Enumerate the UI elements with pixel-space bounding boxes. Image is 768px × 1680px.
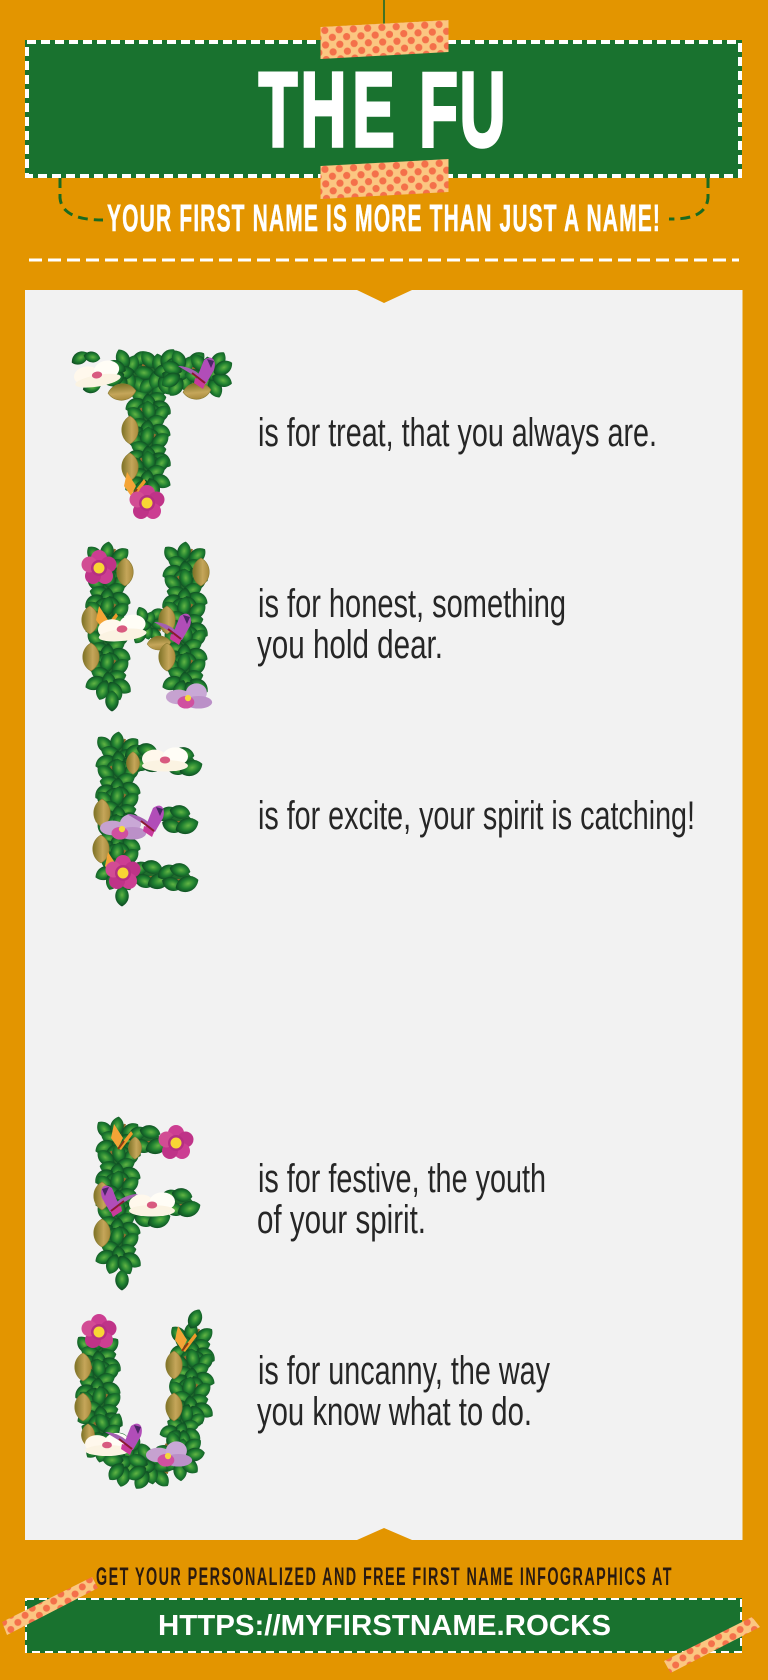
hanging line [383,0,385,25]
butterfly [101,1186,138,1217]
flower [129,1192,175,1216]
flower [97,613,147,643]
flower [72,359,122,390]
letter E [92,730,205,906]
butterfly [178,358,215,389]
butterfly [96,606,118,632]
butterfly [154,614,191,645]
flower [158,1125,194,1159]
title: THE FU [259,50,506,169]
text: U lines: you know what to do. [257,1390,532,1434]
flower [146,1441,192,1467]
dashed divider [29,258,739,262]
tape: bottom of header [320,159,448,199]
text: H lines: you hold dear. [257,623,443,667]
text: H lines: is for honest, something [258,582,566,626]
text: U lines [257,1349,550,1434]
text: U lines: is for uncanny, the way [258,1349,550,1393]
flower [82,1314,116,1348]
bracket: left [60,178,103,220]
footer url: HTTPS://MYFIRSTNAME.ROCKS [158,1610,611,1642]
letter F [92,1115,203,1290]
footer banner [25,1598,742,1653]
flower [85,1433,129,1456]
flower [130,485,164,519]
butterfly [111,1124,133,1150]
letter T [69,346,235,519]
text: F lines: is for festive, the youth [258,1157,546,1201]
butterfly [105,852,127,878]
letter H [82,540,212,712]
flower [142,747,188,772]
tape: top [320,20,448,59]
flower [106,855,140,889]
tape: footer left [2,1577,98,1635]
header banner [25,40,742,178]
flower [82,550,116,584]
flower [100,814,146,840]
flower [166,683,212,709]
text: F lines: of your spirit. [257,1198,426,1242]
butterfly [175,1326,197,1352]
butterfly [105,1424,142,1455]
letter U [72,1307,218,1494]
text: F lines [257,1157,546,1242]
tape: footer right [664,1617,760,1673]
butterfly [127,806,164,837]
panel: letters [25,290,742,1540]
bracket: right [669,178,708,219]
text: H lines [257,582,566,667]
butterfly [124,472,146,498]
